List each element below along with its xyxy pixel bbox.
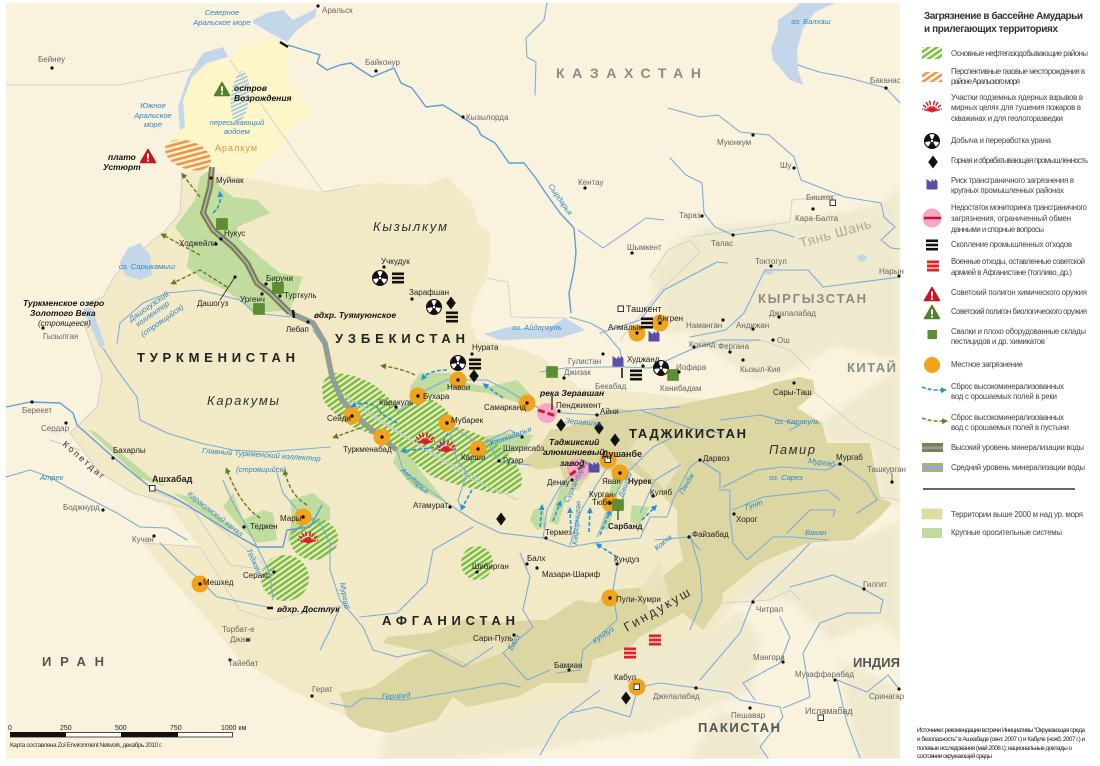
country names: КЫРГЫЗСТАН [758,291,866,306]
legend: pesticide dumps: пестицидов и др. химикатов [951,337,1045,346]
legend: prospective gas: районе Аральского моря [951,77,1020,86]
physical region names: Тянь Шань [797,215,873,251]
city labels inside the basin: Муйнак [216,176,244,185]
city labels inside the basin: Туркменабад [343,445,392,454]
city labels outside the basin: Ош [777,336,790,345]
water body and river labels: оз. Каракуль [775,417,819,426]
city labels inside the basin: Шахрисабз [503,444,545,453]
city labels outside the basin: Джизак [564,368,591,377]
mountains above 2000 m [340,377,892,733]
bold place labels: алюминиевый [543,447,605,457]
water body and river labels: коллектор [134,299,171,329]
city labels outside the basin: Исламабад [805,706,853,716]
territory of the Amu Darya basin [70,170,892,733]
city labels inside the basin: Ангрен [657,314,683,323]
water body and river labels: Южное [140,101,166,110]
transboundary industrial risk [588,331,660,472]
Soviet military waste [624,634,661,658]
city labels outside the basin: Талас [711,239,733,248]
city labels inside the basin: Ходжейли [179,239,217,248]
legend: local pollution [924,357,1023,373]
city labels inside the basin: Сейди [327,414,351,423]
water body and river labels [39,8,836,701]
city labels inside the basin: Мургаб [836,453,863,462]
legend: high mineralization: Высокий уровень минерализации воды [951,443,1084,452]
city labels inside the basin: Самарканд [484,403,526,412]
city dots and capital squares [30,4,901,720]
water body and river labels: Вахан [805,528,827,537]
local pollution hot spots [192,314,668,696]
sources note [917,727,1085,760]
drying water body hatch [228,70,252,124]
city labels inside the basin: Пули-Хумри [616,595,661,604]
legend: industrial waste: Скопление промышленных отходов [951,240,1072,249]
transboundary monitoring gaps [537,403,589,480]
mining and manufacturing [446,296,631,704]
legend: monitoring gaps: данными и спорные вопросы [951,225,1044,234]
water body and river labels: Кашкадарья [489,425,533,448]
legend: drainage to deserts: вод с орошаемых полей в пустыни [951,423,1069,432]
bold place labels: (строящееся) [38,319,91,328]
bold place labels: река Зеравшан [539,388,604,398]
city labels outside the basin: Ташкурган [867,465,906,474]
city labels inside the basin: Кабул [614,673,636,682]
scale bar: 1000 км [221,725,247,732]
legend: oil and gas: Основные нефтегазодобывающие районы [951,49,1088,58]
city labels outside the basin: Пешавар [731,711,766,720]
country names: УЗБЕКИСТАН [335,331,465,346]
water body and river labels: Дашти [616,470,634,500]
physical region names: Аралкум [215,143,257,153]
legend [922,47,1088,538]
bold place labels: завод [560,458,584,468]
city labels inside the basin: Бухара [423,392,450,401]
city labels inside the basin: Балх [527,554,545,563]
city labels outside the basin [22,6,906,720]
city labels inside the basin: Курган- [589,490,617,499]
city labels outside the basin: Торбат-е [222,625,255,634]
water body and river labels: Мургаб [808,456,836,469]
city labels inside the basin: Хорог [736,515,758,524]
bold place labels: Возрождения [234,93,292,103]
city labels inside the basin: Алмалык [608,323,642,332]
city labels outside the basin: Аральск [322,6,353,15]
bold place labels: Таджикский [549,437,600,447]
city labels inside the basin: Навои [447,383,470,392]
water body and river labels: водоем [224,127,251,136]
city labels outside the basin: Шымкент [627,243,662,252]
city labels inside the basin: Яван [602,477,621,486]
scale bar [8,725,247,737]
legend: biological weapons: Советский полигон биологического оружия [951,307,1087,316]
industrial waste [392,272,653,380]
city labels inside the basin: Дашогуз [197,299,229,308]
city labels inside the basin [113,176,863,682]
city labels outside the basin: Гилгит [863,580,887,589]
city labels inside the basin: Термез [545,528,572,537]
bold place labels: Сарбанд [608,522,643,531]
legend: industrial risk [926,176,1074,195]
city labels outside the basin: Кызыл-Кия [740,365,781,374]
country names: ИНДИЯ [853,655,900,670]
city labels outside the basin: Сердар [41,424,70,433]
city labels inside the basin: Нукус [224,229,245,238]
city labels outside the basin: Наманган [686,321,722,330]
legend: local pollution: Местное загрязнение [951,360,1023,369]
city labels outside the basin: Гулистан [568,357,601,366]
country names: ТУРКМЕНИСТАН [137,350,295,365]
high mineralization section of the Amu Darya [203,167,290,313]
water body and river labels: пересыхающий [210,118,265,127]
city labels inside the basin: Ашхабад [152,474,193,484]
legend: drainage to rivers [922,382,1064,401]
city labels outside the basin: Кара-Балта [795,214,839,223]
legend: territory above 2000 m: Территории выше 2000 м над ур. моря [951,510,1083,519]
water body and river labels: Каракумский канал [186,489,245,539]
city labels inside the basin: Теджен [250,522,278,531]
city labels inside the basin: Учкудук [381,257,410,266]
city labels inside the basin: Худжанд [627,355,660,364]
country names: АФГАНИСТАН [382,613,515,628]
water body and river labels: Балх [506,632,523,652]
city labels outside the basin: Кызылорда [466,113,509,122]
physical region names [61,143,873,635]
lighter relief inside mountains [440,435,680,665]
water body and river labels: Дашогузский [126,289,171,324]
city labels outside the basin: Канибадам [660,384,701,393]
country names: КИТАЙ [847,360,896,375]
city labels inside the basin: Бируни [266,274,293,283]
legend: chemical weapons: Советский полигон химического оружия [951,288,1087,297]
city labels inside the basin: Айни [600,407,619,416]
bold place labels: вдхр. Туямуюнское [314,310,396,320]
legend: mining [928,156,1088,168]
legend: mining: Горная и обрабатывающая промышленность [951,156,1088,165]
water body and river labels: Аральское [133,111,172,120]
city labels outside the basin: Читрал [756,605,783,614]
drainage to rivers [213,194,655,557]
city labels outside the basin: Сринагар [869,692,905,701]
legend title: и прилегающих территориях [924,24,1058,35]
legend: irrigation: Крупные оросительные системы [951,528,1062,537]
medium mineralization section of the Amu Darya [290,313,397,450]
legend: drainage to deserts: Сброс высокоминерализованных [951,413,1064,422]
legend: nuclear explosions: Участки подземных ядерных взрывов в [951,93,1083,102]
nuclear explosion sites [298,432,456,543]
city labels outside the basin: Тайебат [228,659,258,668]
prospective gas fields near the Aral Sea [161,134,215,176]
legend: medium mineralization: Средний уровень минерализации воды [951,463,1085,472]
city labels outside the basin: Баканас [870,76,901,85]
city labels inside the basin: Гузар [503,456,524,465]
water body and river labels: оз. Сарыкамыш [119,262,176,271]
country names: КАЗАХСТАН [556,65,701,81]
city labels inside the basin: Нурата [472,343,499,352]
city labels inside the basin: Сари-Пуль [473,634,513,643]
legend: prospective gas [922,67,1085,86]
legend: uranium: Добыча и переработка урана [951,136,1052,145]
physical region names: Гиндукуш [621,585,693,635]
legend: military waste: Военные отходы, оставленные советской [951,257,1085,266]
irrigated areas [88,170,650,543]
city labels outside the basin: Музаффарабад [795,670,854,679]
city labels outside the basin: Шу [780,161,791,170]
legend: drainage to deserts [922,413,1069,432]
city labels outside the basin: Токтогул [755,257,787,266]
city labels outside the basin: Байконур [365,58,401,67]
city labels outside the basin: Коканд [689,340,716,349]
legend: military waste [927,257,1085,277]
legend: biological weapons [924,306,1087,318]
sources note: полевые исследования (май 2008 г.); национальные доклады о [917,744,1072,752]
city labels inside the basin: Каракуль [379,398,413,407]
bold place labels: Туркменское озеро [23,298,104,308]
scale bar: 250 [60,725,72,732]
drainage to deserts [163,175,415,518]
country names [42,65,900,735]
dams and leader lines [220,42,892,608]
bold place labels: Нурек [628,477,652,486]
sources note: состоянии окружающей среды [917,752,992,760]
bold place labels: плато [108,152,136,162]
legend: industrial risk: Риск трансграничного загрязнения в [951,176,1074,185]
water body and river labels: Гунт [744,498,764,512]
water body and river labels: Герируд [382,691,411,701]
water body and river labels: Сурхандарья [562,458,589,504]
water body and river labels: Теджен [244,547,264,575]
legend: nuclear explosions: мирных целях для тушения пожаров в [951,103,1081,112]
water body and river labels: Сырдарья [546,182,574,217]
legend title [924,10,1083,35]
bold place labels: Золотого Века [30,308,96,318]
legend: military waste: армией в Афганистане (топливо, др.) [951,268,1072,277]
city labels inside the basin: Шибирган [472,562,509,571]
water body and river labels: Амударья [398,465,430,496]
state borders [6,60,900,620]
legend title: Загрязнение в бассейне Амударьи [924,10,1083,22]
relief: foothills outside the basin [380,187,900,759]
city labels inside the basin: Мары [280,514,302,523]
sources note: и безопасность" в Ашхабаде (сент. 2007 г.) и Кабуле (нояб. 2007 г.) и [917,735,1085,743]
Aralkum dried sea bed [167,40,312,177]
city labels inside the basin: Мубарек [451,416,484,425]
water body and river labels: Кокча [653,533,674,553]
legend: pesticide dumps: Свалки и плохо оборудованные склады [951,327,1086,336]
legend: nuclear explosions: скважинах и для геологоразведки [951,114,1063,123]
physical region names: Памир [769,442,815,457]
city labels inside the basin: Лебап [286,325,309,334]
city labels outside the basin: Бекабад [595,382,627,391]
chemical weapons polygon [140,150,156,162]
bold place labels [23,83,652,614]
water body and river labels: Кундуз [591,624,616,646]
water body and river labels: море [144,120,162,129]
city labels outside the basin: Мангора [753,653,785,662]
country names: ПАКИСТАН [698,720,780,735]
city labels inside the basin: Зарафшан [409,288,449,297]
city labels outside the basin: Джелалабад [653,692,700,701]
physical region names: Каракумы [207,393,279,408]
scale bar: 750 [170,725,182,732]
city labels inside the basin: Ургенч [240,295,265,304]
city labels inside the basin: Мазари-Шариф [542,570,601,579]
water body and river labels: (строящийся) [139,302,186,339]
city labels outside the basin: Джам [230,635,251,644]
city labels inside the basin: Бахарлы [113,446,146,455]
legend: pesticide dumps [928,327,1086,346]
city labels outside the basin: Джалалабад [769,309,816,318]
city labels outside the basin: Кентау [578,178,603,187]
lakes and seas [83,3,867,426]
city labels inside the basin: Куляб [650,488,672,497]
water body and river labels: Пяндж [677,471,697,496]
bold place labels: вдхр. Достлук [277,604,340,614]
legend: prospective gas: Перспективные газовые месторождения в [951,67,1085,76]
pesticide dumps [216,218,678,510]
city labels inside the basin: Серахс [243,571,270,580]
legend: monitoring gaps: загрязнения, ограниченный обмен [951,214,1071,223]
bold place labels: Устюрт [103,162,141,172]
water body and river labels: Кафирниган [570,500,583,545]
water body and river labels: Главный Туркменский коллектор [202,446,321,463]
oil and gas production areas [261,373,522,601]
city labels inside the basin: Ташкент [626,304,661,314]
city labels inside the basin: Душанбе [602,449,642,459]
legend: industrial waste [926,240,1072,250]
physical region names: Кызылкум [373,219,447,234]
legend: monitoring gaps: Недостаток мониторинга трансграничного [951,203,1088,212]
scale bar: 0 [8,725,12,732]
country names: ТАДЖИКИСТАН [629,426,746,441]
city labels inside the basin: Бамиан [554,661,583,670]
city labels outside the basin: Муюнкум [717,138,751,147]
water body and river labels: оз. Айдаркуль [512,323,562,332]
city labels outside the basin: Нарын [879,267,904,276]
city labels inside the basin: Карши [461,453,485,462]
legend: oil and gas [922,47,1088,59]
legend: uranium [924,133,1052,149]
water body and river labels: Зеравшан [565,416,602,428]
bold place labels: остров [234,83,267,93]
water body and river labels: оз. Сарез [769,473,803,482]
legend: industrial risk: крупных промышленных районах [951,186,1064,195]
city labels outside the basin: Андижан [736,321,769,330]
water body and river labels: (строящийся) [236,465,287,474]
legend: monitoring gaps [922,203,1088,234]
city labels inside the basin: Файзабад [692,530,729,539]
city labels outside the basin: Герат [312,685,333,694]
city labels outside the basin: Иофара [676,363,707,372]
water body and river labels: Аральское море [192,18,251,27]
city labels outside the basin: Фергана [718,342,750,351]
water body and river labels: оз. Балхаш [791,17,831,26]
water body and river labels: Северное [205,8,239,17]
water body and river labels: Мургаб [338,582,352,610]
map credit: Карта составлена Zoï Environment Network, декабрь 2010 г. [10,741,162,749]
city labels inside the basin: Турткуль [284,291,317,300]
city labels outside the basin: Кучан [132,535,154,544]
city labels outside the basin: Бишкек [806,193,834,202]
canals and collectors [50,387,518,570]
city labels inside the basin: Дарвоз [703,454,730,463]
city labels inside the basin: Денау [547,478,570,487]
legend: chemical weapons [924,288,1087,300]
city labels inside the basin: Тюбе [592,498,612,507]
biological weapons polygon [214,82,230,96]
city labels inside the basin: Пенджикент [556,401,602,410]
legend: drainage to rivers: вод с орошаемых полей в реки [951,392,1057,401]
water body and river labels: Атрек [39,473,64,482]
city labels inside the basin: Атамурат [413,501,448,510]
uranium mining [372,270,669,376]
sources note: Источники: рекомендации встречи Инициативы "Окружающая среда [917,727,1085,734]
legend: nuclear explosions [922,93,1083,123]
city labels outside the basin: Тараз [679,211,701,220]
city labels outside the basin: Боджнурд [63,503,100,512]
country names: ИРАН [42,654,104,669]
city labels outside the basin: Бейнеу [38,55,65,64]
physical region names: Копетдаг [61,439,107,481]
legend: drainage to rivers: Сброс высокоминерализованных [951,382,1064,391]
city labels outside the basin: Берекет [22,406,52,415]
city labels inside the basin: Сары-Таш [773,388,812,397]
city labels inside the basin: Кундуз [614,555,640,564]
scale bar: 500 [115,725,127,732]
city labels outside the basin: Гызылгая [43,332,78,341]
city labels inside the basin: Мешхед [203,578,234,587]
